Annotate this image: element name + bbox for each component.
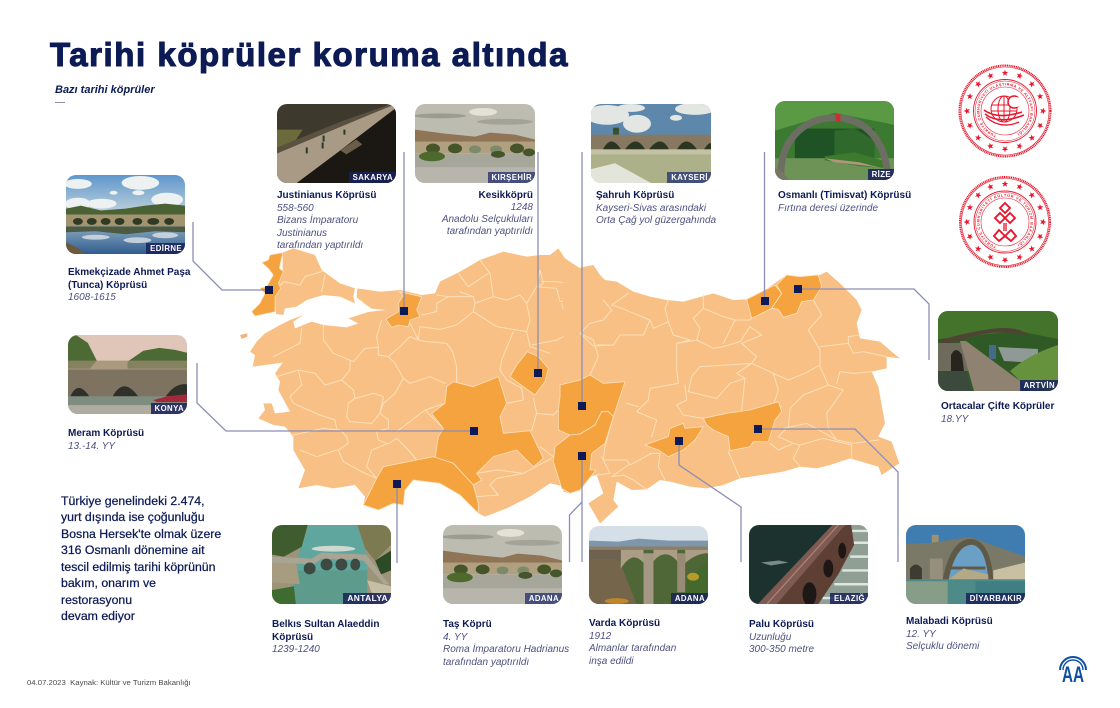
text: Rize bridge (778, 190, 911, 214)
text: Antalya bridge: Belkıs Sultan Alaeddin (272, 619, 379, 630)
label: RİZE (868, 169, 894, 180)
text: Antalya bridge: Köprüsü (272, 632, 313, 643)
text block: summary: 316 Osmanlı dönemine ait (61, 543, 205, 557)
label: EDİRNE: EDİRNE (150, 244, 182, 253)
province: Artvin (772, 275, 822, 317)
label: EDİRNE (146, 243, 185, 254)
panel: Palu bridge (749, 525, 868, 655)
text: Edirne bridge: Ekmekçizade Ahmet Paşa (68, 267, 190, 278)
text block: summary: Bosna Hersek'te olmak üzere (61, 527, 221, 541)
panel: Varda bridge (588, 526, 708, 667)
text: Palu bridge (749, 619, 814, 655)
text: Kayseri bridge: Kayseri-Sivas arasındaki (596, 203, 706, 214)
text: Artvin bridge: 18.YY (941, 414, 968, 425)
label: ADANA (Varda) (671, 593, 708, 604)
text block: summary: devam ediyor (61, 609, 135, 623)
text block: summary: restorasyonu (61, 593, 132, 607)
text: Palu bridge: Palu Köprüsü (749, 619, 814, 630)
label: KONYA (151, 403, 187, 414)
province: Rize (747, 285, 782, 318)
text: Kırşehir bridge: Anadolu Selçukluları (442, 214, 533, 225)
label: SAKARYA (349, 172, 396, 183)
text: Sakarya bridge (277, 190, 376, 251)
panel: Taş Köprü (443, 525, 569, 668)
text: Edirne bridge: (Tunca) Köprüsü (68, 280, 147, 291)
text: Taş Köprü: Roma İmparatoru Hadrianus (443, 644, 569, 655)
title: Tarihi köprüler koruma altında (50, 36, 569, 73)
label: ARTVİN: ARTVİN (1024, 381, 1055, 390)
subtitle: Bazı tarihi köprüler (55, 84, 155, 96)
text: Diyarbakır bridge: 12. YY (906, 629, 936, 640)
text: Varda bridge (588, 618, 676, 667)
label: KONYA: KONYA (155, 404, 184, 413)
panel: Rize bridge (775, 101, 911, 214)
label: ANTALYA: ANTALYA (347, 593, 388, 603)
text: Kırşehir bridge: tarafından yaptırıldı (447, 226, 533, 237)
photo: Konya (68, 335, 187, 414)
text: Varda bridge: Almanlar tarafından (589, 643, 676, 654)
photo: Diyarbakır (906, 525, 1025, 604)
text: Kırşehir bridge: 1248 (511, 202, 533, 213)
label: KIRŞEHİR (488, 172, 535, 183)
logo: AA (1059, 656, 1087, 684)
text block: summary: bakım, onarım ve (61, 576, 156, 590)
panel: Antalya bridge (272, 525, 391, 655)
label: ADANA (Taş Köprü) (525, 593, 562, 604)
text: Sakarya bridge: Bizans İmparatoru (277, 215, 358, 226)
panel: Sakarya bridge (277, 104, 396, 251)
text: Varda bridge: Varda Köprüsü (589, 618, 660, 629)
label: ELAZIĞ (830, 593, 868, 604)
seal: Ulaştırma ve Altyapı Bakanlığı: TÜRKİYE CUMHURİYETİ ULAŞTIRMA VE ALTYAPI BAKANLIĞI (976, 83, 1034, 138)
text: Diyarbakır bridge: Malabadi Köprüsü (906, 616, 993, 627)
province: Malatya region (703, 402, 782, 451)
photo: Adana Varda (589, 526, 708, 604)
panel: Edirne bridge (66, 175, 190, 303)
text: Antalya bridge (272, 619, 379, 655)
text: Palu bridge: Uzunluğu (749, 632, 791, 643)
text: Sakarya bridge: Justinianus (277, 228, 327, 239)
text: Diyarbakır bridge (906, 616, 993, 652)
province: Kayseri (558, 375, 625, 435)
label: RİZE: RİZE (872, 170, 891, 179)
label: ELAZIĞ: ELAZIĞ (834, 594, 865, 603)
text: Kayseri bridge (596, 190, 716, 226)
label: KAYSERİ: KAYSERİ (671, 173, 708, 182)
text: Palu bridge: 300-350 metre (749, 644, 814, 655)
province: Antalya (363, 457, 478, 513)
province: Konya (432, 377, 543, 485)
label: KIRŞEHİR: KIRŞEHİR (492, 173, 532, 182)
text: Rize bridge: Osmanlı (Timisvat) Köprüsü (778, 190, 911, 201)
text: Sakarya bridge: 558-560 (277, 203, 314, 214)
footer source: 04.07.2023 Kaynak: Kültür ve Turizm Bakanlığı (27, 678, 191, 687)
text: Varda bridge: 1912 (589, 631, 611, 642)
province: Edirne (252, 253, 283, 316)
text: Artvin bridge (941, 401, 1054, 425)
text: Artvin bridge: Ortacalar Çifte Köprüler (941, 401, 1054, 412)
photo: Rize (775, 101, 894, 180)
province: Kırşehir (510, 352, 548, 395)
text: Konya bridge (68, 428, 144, 452)
text block: summary (60, 494, 221, 623)
text: Taş Köprü (443, 619, 569, 668)
label: ADANA (Varda): ADANA (675, 594, 705, 603)
text: Konya bridge: Meram Köprüsü (68, 428, 144, 439)
text: Diyarbakır bridge: Selçuklu dönemi (906, 641, 979, 652)
label: KAYSERİ (667, 172, 711, 183)
seal: Kültür ve Turizm Bakanlığı (959, 176, 1051, 268)
text: Kırşehir bridge (442, 190, 533, 237)
photo: Kayseri (591, 104, 711, 183)
text: Kayseri bridge: Orta Çağ yol güzergahında (596, 215, 716, 226)
panel: Kırşehir bridge (415, 104, 535, 237)
photo: Elazığ (749, 525, 868, 604)
label: DİYARBAKIR: DİYARBAKIR (970, 594, 1022, 603)
photo: Kırşehir (415, 104, 535, 183)
text: Antalya bridge: 1239-1240 (272, 644, 320, 655)
photo: Adana Taş Köprü (443, 525, 562, 604)
photo: Artvin (938, 311, 1058, 391)
text: Edirne bridge (68, 267, 190, 303)
text: Kayseri bridge: Şahruh Köprüsü (596, 190, 674, 201)
province: Adana (553, 412, 613, 493)
text block: summary: Türkiye genelindeki 2.474, (61, 494, 205, 508)
label: ADANA (Taş Köprü): ADANA (529, 594, 559, 603)
text: Edirne bridge: 1608-1615 (68, 292, 116, 303)
label: SAKARYA: SAKARYA (353, 173, 393, 182)
text: Taş Köprü: tarafından yaptırıldı (443, 657, 529, 668)
text block: summary: tescil edilmiş tarihi köprünün (61, 560, 215, 574)
photo: Antalya (272, 525, 391, 604)
text: Sakarya bridge: tarafından yaptırıldı (277, 240, 363, 251)
map: eastern half (553, 265, 900, 523)
photo: Edirne (66, 175, 185, 254)
text block: summary: yurt dışında ise çoğunluğu (61, 510, 205, 524)
map: western half (240, 248, 580, 517)
text: Sakarya bridge: Justinianus Köprüsü (277, 190, 376, 201)
province: Elazığ region (645, 423, 703, 457)
text: Rize bridge: Fırtına deresi üzerinde (778, 203, 878, 214)
panel: Kayseri bridge (591, 104, 716, 226)
text: Taş Köprü: Taş Köprü (443, 619, 492, 630)
label: ARTVİN (1020, 380, 1058, 391)
province: Sakarya (386, 292, 422, 327)
seal: Kültür ve Turizm Bakanlığı: TÜRKİYE CUMHURİYETİ KÜLTÜR VE TURİZM BAKANLIĞI (977, 194, 1033, 248)
panel: Diyarbakır bridge (906, 525, 1025, 652)
seal: Ulaştırma ve Altyapı Bakanlığı (958, 64, 1052, 158)
photo: Sakarya (277, 104, 396, 183)
panel: Konya bridge (68, 335, 187, 452)
panel: Artvin bridge (938, 311, 1058, 425)
text: Konya bridge: 13.-14. YY (68, 441, 115, 452)
text: Varda bridge: inşa edildi (589, 656, 633, 667)
subtitle dash (55, 102, 65, 103)
text: Kırşehir bridge: Kesikköprü (479, 190, 533, 201)
text: Taş Köprü: 4. YY (443, 632, 467, 643)
